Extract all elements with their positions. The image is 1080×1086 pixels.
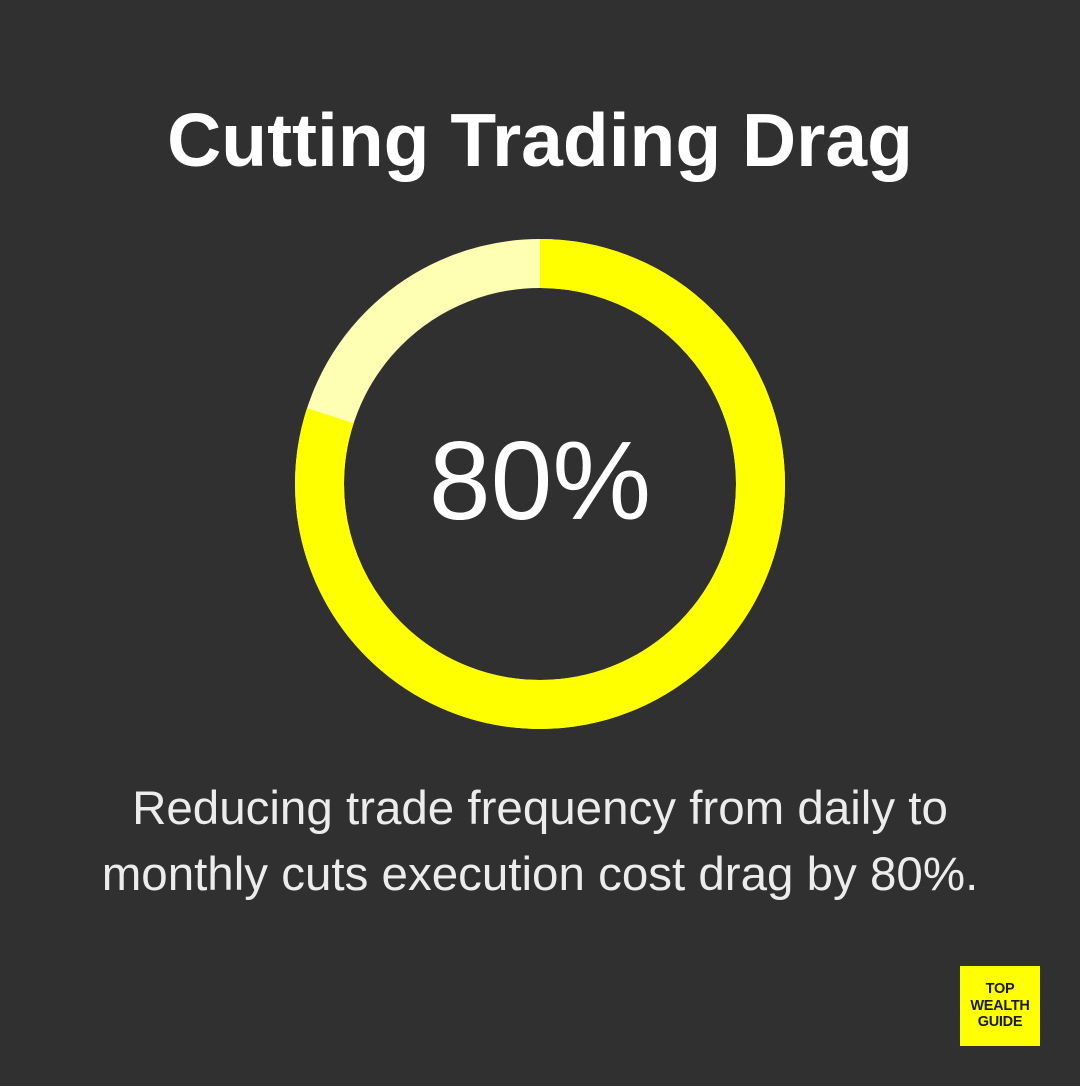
title: Cutting Trading Drag [167, 98, 913, 182]
caption [102, 782, 978, 901]
logo [960, 966, 1040, 1046]
logo: GUIDE [978, 1014, 1022, 1030]
logo: TOP [986, 981, 1014, 997]
ring background segment [320, 264, 760, 704]
ring value segment 80% [320, 264, 760, 704]
caption: Reducing trade frequency from daily to [132, 782, 948, 835]
caption: monthly cuts execution cost drag by 80%. [102, 848, 978, 901]
center value: 80% [429, 419, 651, 543]
logo: WEALTH [970, 998, 1030, 1014]
